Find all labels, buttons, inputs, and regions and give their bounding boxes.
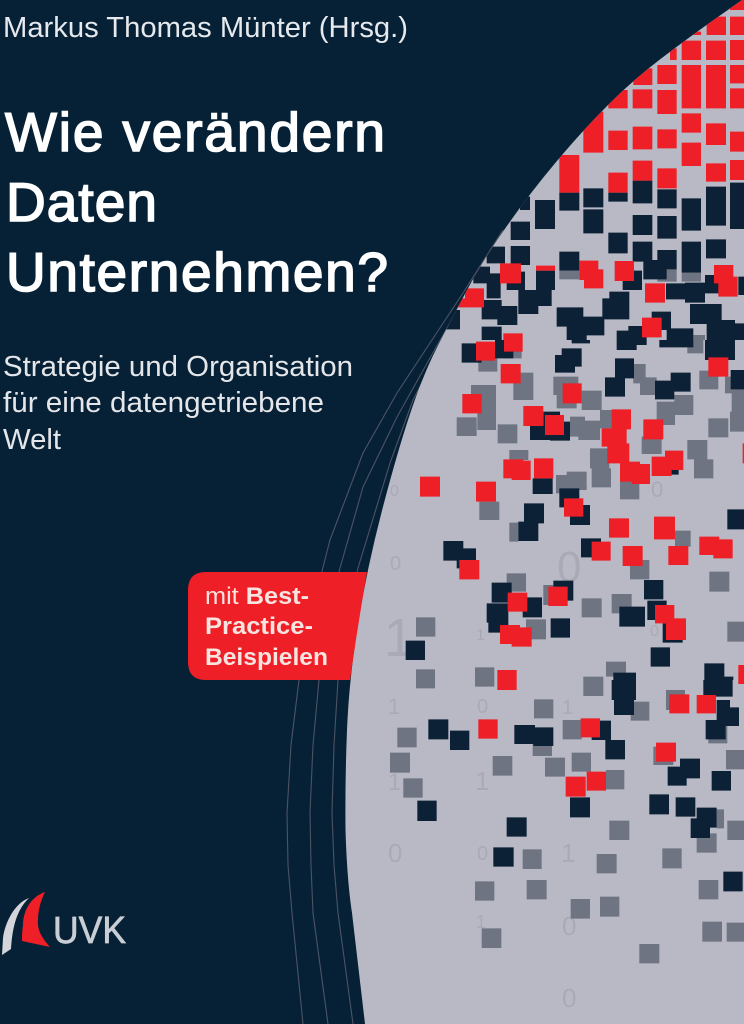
- grey data disc: [345, 0, 744, 1024]
- binary digits: 0: [557, 543, 581, 592]
- navy squares: [406, 181, 744, 891]
- author: Markus Thomas Münter (Hrsg.): [3, 12, 408, 44]
- binary digits: 0: [562, 983, 576, 1013]
- logo: UVK: UVK: [53, 910, 126, 952]
- binary digits: 1: [476, 912, 486, 932]
- title: Wie verändern: [5, 101, 385, 163]
- logo: UVK: [2, 892, 126, 955]
- badge: best practice: [188, 572, 367, 680]
- subtitle: [3, 351, 353, 456]
- binary digits: 1: [388, 694, 400, 719]
- binary digits: 0: [650, 623, 659, 640]
- binary digits: 0: [390, 483, 399, 500]
- grey squares: [390, 269, 744, 963]
- binary digits: 0: [651, 477, 663, 502]
- subtitle: Welt: [3, 424, 61, 456]
- title: [5, 101, 388, 303]
- binary digits: 1: [476, 627, 485, 644]
- binary digits: [384, 477, 663, 1013]
- badge: best practice: Practice-: [205, 613, 313, 640]
- binary digits: 1: [561, 838, 575, 868]
- subtitle: Strategie und Organisation: [3, 351, 353, 383]
- thin arc lines: [287, 230, 503, 1024]
- red squares: [420, 0, 744, 797]
- subtitle: für eine datengetriebene: [3, 387, 324, 419]
- binary digits: 1: [562, 697, 573, 719]
- title: Unternehmen?: [6, 241, 388, 303]
- binary digits: 1: [388, 769, 401, 796]
- binary digits: 0: [562, 911, 576, 941]
- binary digits: 0: [477, 843, 488, 865]
- binary digits: 1: [384, 608, 414, 668]
- binary digits: 0: [477, 696, 488, 718]
- badge: best practice: mit Best-: [205, 583, 309, 610]
- data squares: [390, 0, 744, 963]
- binary digits: 0: [388, 838, 402, 868]
- binary digits: 0: [390, 553, 401, 575]
- binary digits: 1: [475, 766, 489, 796]
- badge: best practice: Beispielen: [205, 644, 328, 671]
- title: Daten: [6, 171, 157, 233]
